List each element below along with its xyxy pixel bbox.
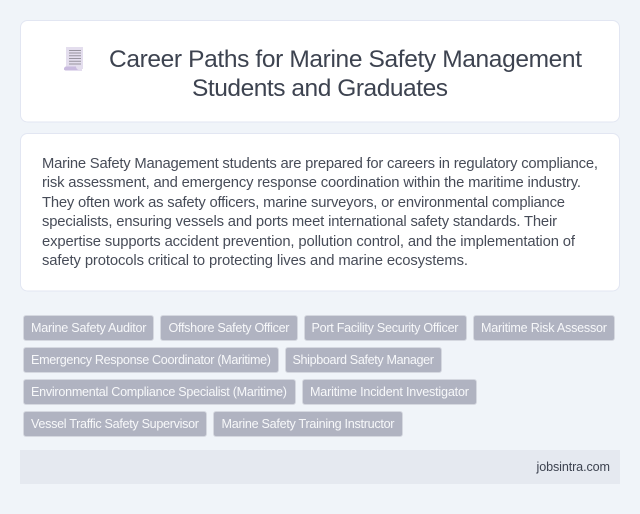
panel: description card — [20, 134, 620, 291]
description text: They often work as safety officers, marine surveyors, or environmental compliance — [42, 195, 565, 211]
panel: title card — [20, 20, 620, 122]
title — [109, 46, 582, 102]
tag: Environmental Compliance Specialist (Maritime): Environmental Compliance Specialist (Maritime) — [31, 385, 287, 399]
footer bar — [20, 450, 620, 484]
tag: Offshore Safety Officer: Offshore Safety Officer — [168, 321, 290, 335]
title: Career Paths for Marine Safety Management — [109, 46, 582, 73]
description text: expertise supports accident prevention, pollution control, and the implementation of — [42, 234, 576, 250]
tag: Vessel Traffic Safety Supervisor — [24, 412, 206, 436]
tag: Marine Safety Auditor — [24, 316, 154, 340]
icon: document scroll — [64, 47, 83, 70]
description text — [42, 156, 598, 269]
tag: Vessel Traffic Safety Supervisor: Vessel Traffic Safety Supervisor — [31, 417, 199, 431]
description text: specialists, ensuring vessels and ports meet international safety standards. Their — [42, 214, 557, 230]
tag: Marine Safety Training Instructor: Marine Safety Training Instructor — [222, 417, 394, 431]
tag: Emergency Response Coordinator (Maritime): Emergency Response Coordinator (Maritime) — [31, 353, 271, 367]
tag: Port Facility Security Officer: Port Facility Security Officer — [312, 321, 458, 335]
description text: safety protocols critical to protecting lives and marine ecosystems. — [42, 253, 468, 269]
tag: Maritime Risk Assessor: Maritime Risk Assessor — [481, 321, 607, 335]
tag: Maritime Incident Investigator — [302, 380, 476, 404]
tag: Marine Safety Training Instructor — [214, 412, 402, 436]
title: Students and Graduates — [192, 75, 448, 102]
career path tags — [24, 316, 614, 436]
tag: Shipboard Safety Manager — [286, 348, 442, 372]
tag: Marine Safety Auditor: Marine Safety Auditor — [31, 321, 146, 335]
tag: Offshore Safety Officer — [160, 316, 298, 340]
tag: Maritime Incident Investigator: Maritime Incident Investigator — [310, 385, 469, 399]
tag: Port Facility Security Officer — [304, 316, 466, 340]
description text: risk assessment, and emergency response coordination within the maritime industry. — [42, 175, 581, 191]
description text: Marine Safety Management students are prepared for careers in regulatory compliance, — [42, 156, 598, 172]
tag: Environmental Compliance Specialist (Maritime) — [24, 380, 296, 404]
tag: Maritime Risk Assessor — [474, 316, 614, 340]
tag: Emergency Response Coordinator (Maritime) — [24, 348, 278, 372]
footer source text: jobsintra.com — [536, 460, 610, 474]
tag: Shipboard Safety Manager: Shipboard Safety Manager — [292, 353, 434, 367]
